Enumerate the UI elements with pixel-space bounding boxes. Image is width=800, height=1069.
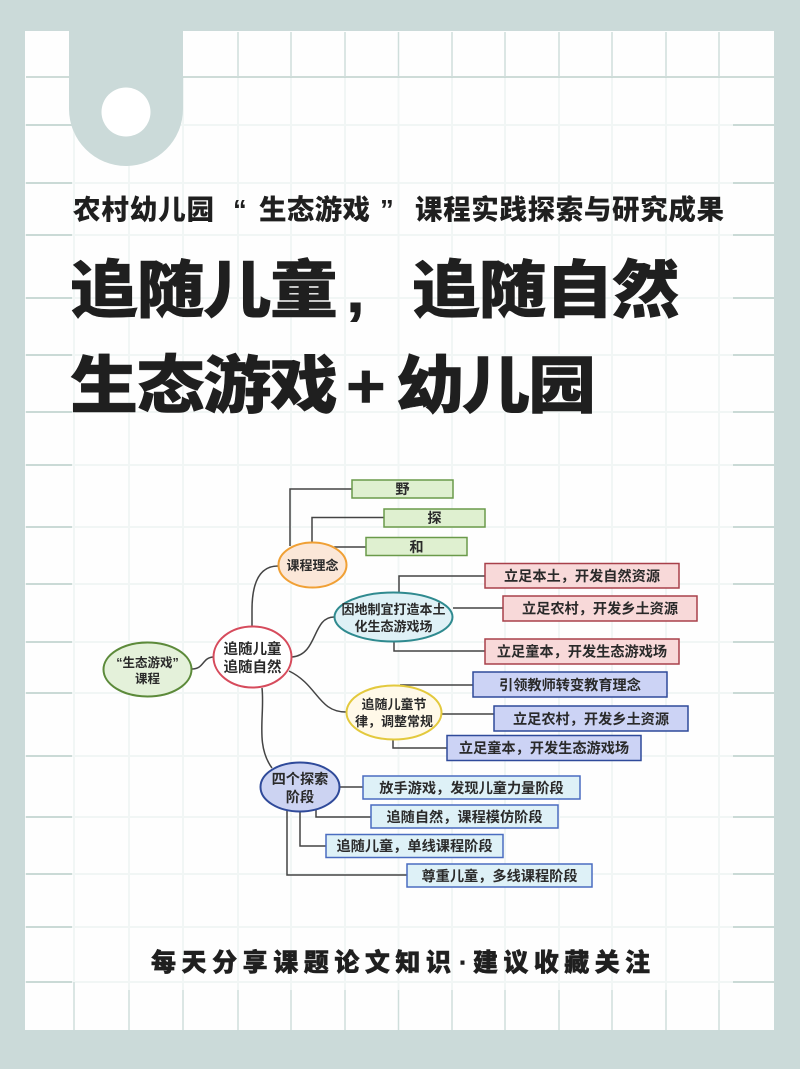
icon: binder tab (69, 28, 183, 166)
leaves: playground: 立足童本，开发生态游戏场 (497, 644, 667, 660)
leaves: concept: 和 (409, 540, 424, 556)
node: center (214, 626, 292, 688)
leaves: playground: 立足农村，开发乡土资源 (522, 600, 678, 618)
node: four stages (260, 762, 340, 812)
leaves: rhythm: 立足农村，开发乡土资源 (513, 711, 669, 728)
subtitle: ” (380, 194, 394, 225)
title line 2: 生态游戏 (70, 351, 338, 421)
leaves: rhythm: 引领教师转变教育理念 (499, 677, 641, 694)
title line 1: 追随儿童 (70, 256, 338, 325)
subtitle: “ (233, 194, 247, 225)
node: rhythm: 律，调整常规 (355, 714, 433, 729)
node: root (104, 642, 192, 696)
node: curriculum concept (278, 542, 346, 588)
node: rhythm: 追随儿童节 (361, 697, 427, 712)
subtitle: 农村幼儿园 (73, 194, 214, 225)
node: root: “生态游戏” (116, 655, 179, 670)
title line 1: , (346, 256, 365, 325)
node: root: 课程 (135, 672, 160, 686)
node: local playground (334, 592, 452, 642)
node: rhythm (346, 686, 442, 740)
node: curriculum concept: 课程理念 (286, 558, 339, 573)
subtitle: 生态游戏 (259, 194, 370, 225)
subtitle: 课程实践探索与研究成果 (415, 194, 724, 225)
title line 2: + (346, 351, 386, 421)
mind map (104, 480, 697, 887)
title line 1: 追随自然 (412, 256, 680, 325)
leaves: concept: 野 (395, 482, 410, 498)
node: center: 追随儿童 (224, 640, 282, 658)
leaves: rhythm: 立足童本，开发生态游戏场 (459, 740, 629, 757)
leaves: stages: 追随儿童，单线课程阶段 (336, 838, 493, 855)
footer text: · (459, 949, 467, 977)
title line 2 (70, 351, 596, 421)
leaves: stages: 尊重儿童，多线课程阶段 (421, 868, 578, 885)
title line 2: 幼儿园 (396, 351, 596, 421)
leaves: playground: 立足本土，开发自然资源 (504, 568, 660, 585)
leaves: stages (326, 776, 592, 887)
subtitle (73, 194, 724, 225)
node: four stages: 阶段 (286, 789, 314, 806)
footer text: 每天分享课题论文知识 (151, 948, 451, 977)
leaves: stages: 追随自然，课程模仿阶段 (386, 809, 543, 826)
leaves: stages: 放手游戏，发现儿童力量阶段 (379, 780, 564, 797)
node: four stages: 四个探索 (272, 771, 328, 788)
node: local playground: 因地制宜打造本土 (341, 602, 446, 617)
leaves: concept (352, 480, 485, 556)
leaves: rhythm (447, 672, 688, 760)
title line 1 (70, 256, 680, 325)
node: local playground: 化生态游戏场 (354, 619, 433, 634)
leaves: concept: 探 (427, 510, 442, 527)
leaves: playground (485, 564, 697, 664)
footer text (151, 948, 650, 977)
node: center: 追随自然 (224, 658, 282, 676)
footer text: 建议收藏关注 (473, 949, 650, 977)
connectors (192, 489, 503, 875)
